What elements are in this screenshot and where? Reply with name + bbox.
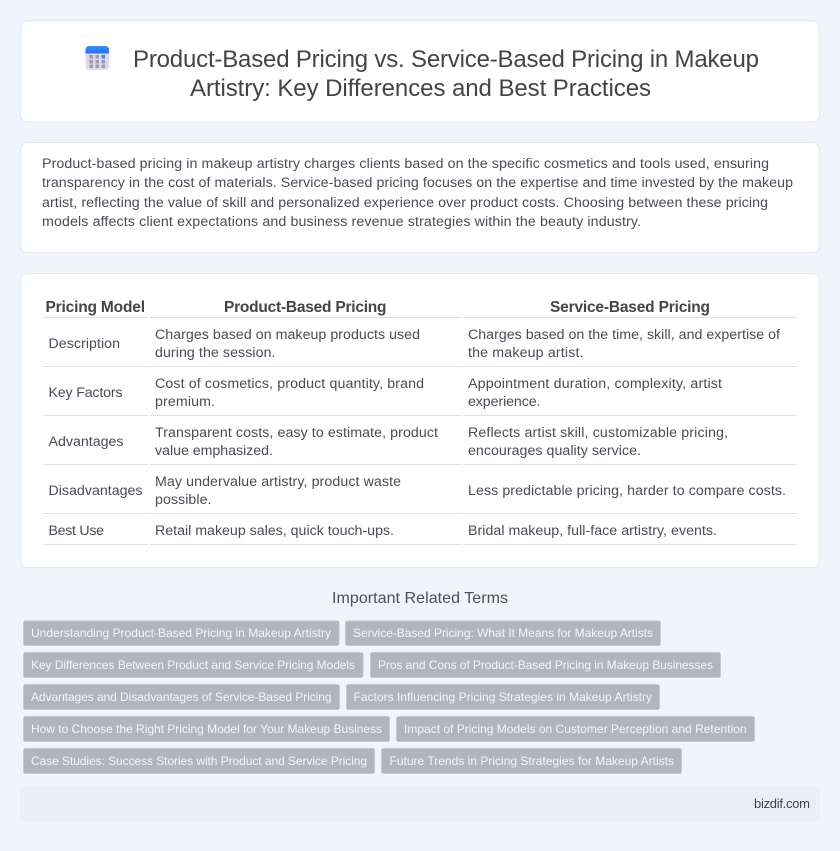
row: advantages: Advantages bbox=[48, 434, 124, 450]
row: description bbox=[48, 327, 780, 361]
row: description: Description bbox=[48, 336, 120, 352]
tag: How to Choose the Right Pricing Model for Your Makeup Business bbox=[31, 722, 382, 736]
row: best use: Best Use bbox=[48, 523, 104, 539]
footer bbox=[20, 787, 820, 821]
intro paragraph: artist, reflecting the value of skill and personalized experience over product costs. Choosing between these pricing bbox=[42, 195, 768, 211]
row: key factors: Cost of cosmetics, product quantity, brand bbox=[155, 376, 424, 392]
title bbox=[133, 46, 759, 102]
row: advantages: encourages quality service. bbox=[468, 443, 641, 459]
row: advantages: value emphasized. bbox=[155, 443, 273, 459]
tag: Future Trends in Pricing Strategies for Makeup Artists bbox=[390, 754, 674, 768]
tag bbox=[24, 621, 339, 646]
footer: bizdif.com bbox=[754, 796, 810, 811]
row: description: Charges based on makeup products used bbox=[155, 327, 420, 343]
row: best use bbox=[48, 523, 717, 539]
table header row: Pricing Model bbox=[46, 299, 145, 316]
row: disadvantages: Less predictable pricing, harder to compare costs. bbox=[468, 483, 786, 499]
intro paragraph: Product-based pricing in makeup artistry charges clients based on the specific cosmetics and tools used, ensuring bbox=[42, 156, 769, 172]
row: disadvantages: May undervalue artistry, product waste bbox=[155, 474, 401, 490]
icon: calendar bbox=[86, 46, 109, 70]
row: description: Charges based on the time, skill, and expertise of bbox=[468, 327, 780, 343]
table header row bbox=[46, 299, 710, 316]
tag: Factors Influencing Pricing Strategies in Makeup Artistry bbox=[354, 690, 652, 704]
tag: Understanding Product-Based Pricing in Makeup Artistry bbox=[31, 626, 331, 640]
row: key factors: Appointment duration, complexity, artist bbox=[468, 376, 722, 392]
panel: comparison table bbox=[20, 274, 820, 568]
related terms tags bbox=[24, 621, 754, 774]
row: description: during the session. bbox=[155, 345, 276, 361]
tag: Key Differences Between Product and Service Pricing Models bbox=[31, 658, 355, 672]
tag: Service-Based Pricing: What It Means for Makeup Artists bbox=[353, 626, 653, 640]
row: key factors bbox=[48, 376, 722, 410]
tag bbox=[382, 748, 682, 774]
row: disadvantages bbox=[48, 474, 786, 508]
row: advantages bbox=[48, 425, 728, 459]
tag: Impact of Pricing Models on Customer Perception and Retention bbox=[404, 722, 746, 736]
tag bbox=[24, 652, 363, 678]
tag bbox=[24, 748, 374, 774]
row: advantages: Reflects artist skill, customizable pricing, bbox=[468, 425, 728, 441]
row: key factors: premium. bbox=[155, 394, 215, 410]
row: description: the makeup artist. bbox=[468, 345, 584, 361]
tag bbox=[24, 684, 340, 710]
tag: Case Studies: Success Stories with Product and Service Pricing bbox=[31, 754, 367, 768]
tag: Pros and Cons of Product-Based Pricing in Makeup Businesses bbox=[378, 658, 713, 672]
tag bbox=[370, 652, 720, 678]
row: advantages: Transparent costs, easy to estimate, product bbox=[155, 425, 438, 441]
tag bbox=[24, 716, 390, 742]
row: key factors: Key Factors bbox=[48, 385, 122, 401]
intro paragraph: models affects client expectations and business revenue strategies within the beauty industry. bbox=[42, 214, 641, 230]
row: best use: Bridal makeup, full-face artistry, events. bbox=[468, 523, 717, 539]
heading: important related terms: Important Related Terms bbox=[332, 590, 508, 607]
row: disadvantages: possible. bbox=[155, 492, 212, 508]
title: Product-Based Pricing vs. Service-Based Pricing in Makeup bbox=[133, 46, 759, 73]
panel: header bbox=[20, 20, 820, 122]
panel: introduction text bbox=[20, 142, 820, 252]
row: best use: Retail makeup sales, quick touch-ups. bbox=[155, 523, 394, 539]
row: disadvantages: Disadvantages bbox=[48, 483, 142, 499]
title: Artistry: Key Differences and Best Practices bbox=[190, 75, 651, 102]
tag: Advantages and Disadvantages of Service-Based Pricing bbox=[31, 690, 332, 704]
table header row: Product-Based Pricing bbox=[224, 299, 386, 316]
intro paragraph: transparency in the cost of materials. Service-based pricing focuses on the expertise and time invested by the makeup bbox=[42, 175, 793, 191]
tag bbox=[346, 621, 660, 646]
intro paragraph bbox=[42, 156, 793, 230]
row: key factors: experience. bbox=[468, 394, 540, 410]
tag bbox=[346, 684, 660, 710]
tag bbox=[396, 716, 754, 742]
table header row: Service-Based Pricing bbox=[550, 299, 710, 316]
